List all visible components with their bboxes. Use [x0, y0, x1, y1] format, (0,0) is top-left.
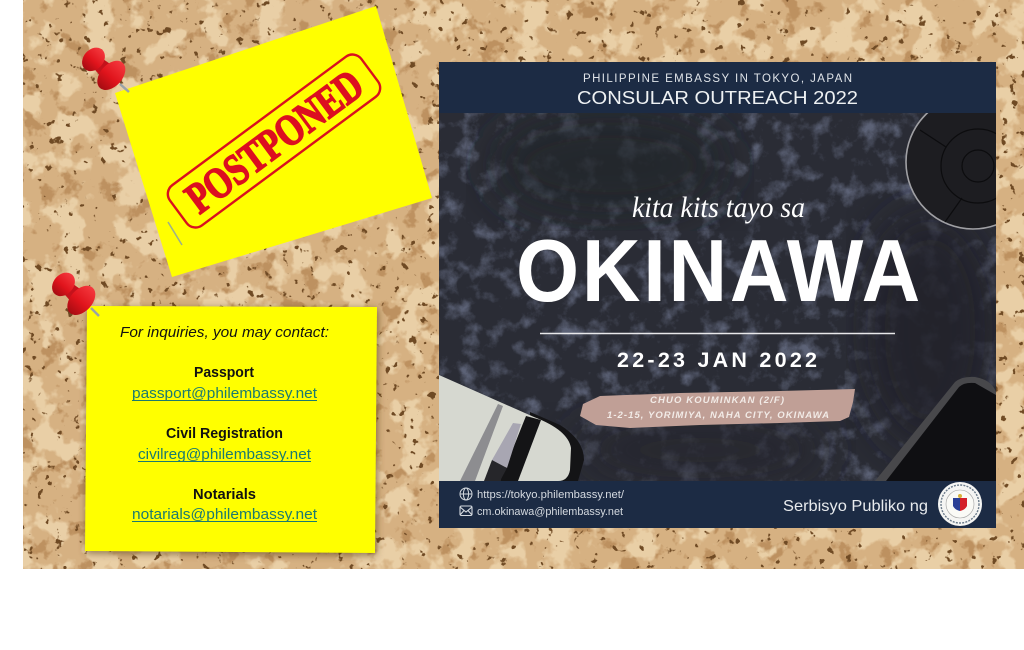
contact: passport: passport@philembassy.net	[132, 385, 318, 402]
venue brush banner	[580, 389, 855, 428]
contact: passport: Passport	[194, 365, 254, 381]
icon: globe	[460, 488, 472, 500]
date: 22-23 JAN 2022	[617, 348, 817, 372]
contact: passport	[132, 365, 318, 402]
phone	[875, 377, 996, 481]
icon: embassy seal	[938, 482, 982, 526]
poster photo background	[439, 113, 996, 481]
venue brush banner: CHUO KOUMINKAN (2/F)	[650, 395, 784, 406]
contact: notarials: notarials@philembassy.net	[132, 506, 318, 523]
sticky note: contacts	[85, 306, 378, 555]
contact intro text: For inquiries, you may contact:	[120, 324, 329, 341]
push pin: contact note	[45, 265, 101, 320]
main title: OKINAWA	[516, 221, 923, 320]
contact: civil registration	[138, 426, 312, 463]
sticky note: postponed	[115, 6, 432, 277]
contact: civil registration: Civil Registration	[166, 426, 283, 442]
poster header band	[439, 62, 996, 113]
poster header band: PHILIPPINE EMBASSY IN TOKYO, JAPAN	[583, 73, 852, 85]
stamp: postponed	[163, 50, 385, 232]
script subtitle: kita kits tayo sa	[632, 191, 805, 224]
dial device	[905, 113, 996, 230]
icon: envelope	[460, 506, 472, 516]
notebook and pens	[439, 375, 584, 481]
contact: civil registration: civilreg@philembassy.net	[138, 446, 312, 463]
poster footer band: Serbisyo Publiko ng	[783, 498, 928, 515]
contact: notarials: Notarials	[193, 487, 256, 503]
poster	[439, 62, 1024, 528]
poster footer band	[439, 481, 996, 528]
poster header band: CONSULAR OUTREACH 2022	[577, 87, 858, 108]
poster footer band: cm.okinawa@philembassy.net	[477, 506, 623, 518]
push pin: top note	[75, 40, 131, 95]
poster footer band: https://tokyo.philembassy.net/	[477, 489, 625, 501]
stamp: postponed: POSTPONED	[176, 60, 372, 223]
contact: notarials	[132, 487, 318, 523]
venue brush banner: 1-2-15, YORIMIYA, NAHA CITY, OKINAWA	[607, 410, 829, 421]
